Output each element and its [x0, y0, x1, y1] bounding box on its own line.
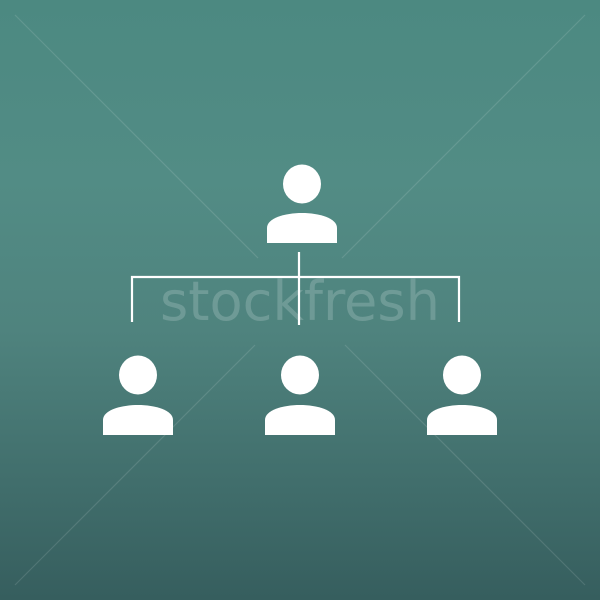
icon: top person: [267, 164, 337, 243]
icon: bottom left person: [103, 356, 173, 435]
icon: bottom right person: [427, 356, 497, 435]
connector lines: [132, 252, 459, 325]
watermark text: stockfresh: [160, 270, 440, 333]
icon: bottom middle person: [265, 356, 335, 435]
